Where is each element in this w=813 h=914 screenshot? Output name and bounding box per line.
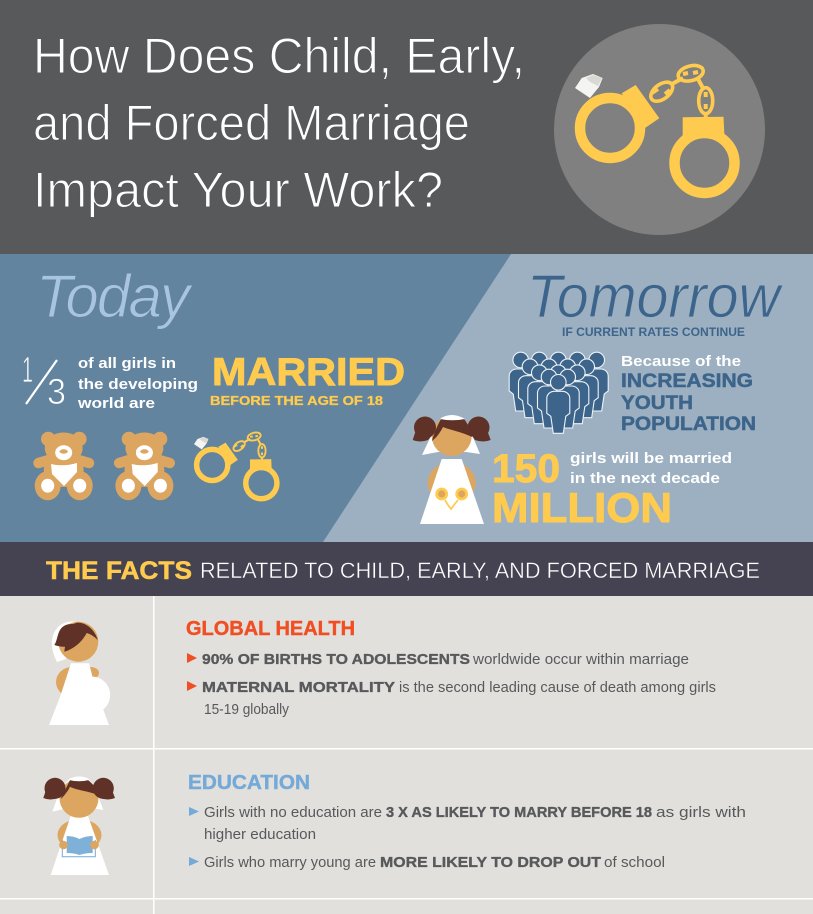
icon: pregnant bride <box>49 622 110 725</box>
bullet: drop out: MORE LIKELY TO DROP OUT <box>380 854 601 871</box>
text: youth population: POPULATION <box>621 414 756 435</box>
panel: today <box>0 254 813 542</box>
heading: today: Today <box>36 263 194 330</box>
icon: handcuffs with diamond ring in circle <box>554 24 765 235</box>
icon: bride with book <box>43 776 115 875</box>
bullet: maternal mortality: 15-19 globally <box>204 701 289 718</box>
text: youth population: Because of the <box>621 353 741 370</box>
bullet: drop out: Girls who marry young are <box>204 854 376 871</box>
text: youth population: INCREASING <box>621 371 753 392</box>
section: education: EDUCATION <box>188 772 310 794</box>
panel: tomorrow <box>323 254 813 542</box>
bullet: likely to marry: 3 X AS LIKELY TO MARRY BEFORE 18 <box>386 804 652 821</box>
stat: one third <box>22 349 66 412</box>
bullet: likely to marry: higher education <box>204 826 316 843</box>
callout: married: BEFORE THE AGE OF 18 <box>210 393 383 408</box>
bullet: drop out <box>189 854 665 871</box>
stat: 150 million <box>492 447 732 531</box>
title <box>33 28 525 218</box>
section: global health <box>186 618 716 718</box>
bullet: maternal mortality: is the second leading cause of death among girls <box>399 679 716 696</box>
text: youth population: YOUTH <box>621 393 693 414</box>
text: of all girls: the developing <box>78 376 198 393</box>
icon: crowd <box>509 352 608 433</box>
heading: tomorrow: Tomorrow <box>527 263 784 330</box>
title: and Forced Marriage <box>33 95 470 151</box>
panel: facts <box>0 596 813 914</box>
bullet: births: worldwide occur within marriage <box>472 651 689 668</box>
text: youth population <box>621 353 756 435</box>
stat: one third: 1 <box>22 349 33 390</box>
stat: one third: 3 <box>47 371 66 412</box>
bullet: likely to marry <box>189 804 746 843</box>
section: global health: GLOBAL HEALTH <box>186 618 355 640</box>
icon: teddy bear <box>115 432 173 500</box>
section: education <box>188 772 746 871</box>
stat: 150 million: girls will be married <box>570 450 732 467</box>
bullet: births: 90% OF BIRTHS TO ADOLESCENTS <box>202 651 470 668</box>
title: How Does Child, Early, <box>33 28 525 84</box>
stat: 150 million: MILLION <box>492 484 672 531</box>
subheading: IF CURRENT RATES CONTINUE <box>562 325 745 339</box>
text: of all girls: of all girls in <box>78 355 176 372</box>
bullet: drop out: of school <box>604 854 665 871</box>
icon: teddy bear <box>35 432 93 500</box>
bullet: maternal mortality: MATERNAL MORTALITY <box>202 679 395 696</box>
band: the facts heading <box>0 542 813 596</box>
icon: handcuffs <box>194 431 277 499</box>
band: the facts heading: THE FACTS <box>46 557 192 585</box>
icon: bride in handcuffs <box>413 415 491 524</box>
callout: married: MARRIED <box>212 351 405 394</box>
text: of all girls: world are <box>77 395 155 412</box>
band: the facts heading: RELATED TO CHILD, EARLY, AND FORCED MARRIAGE <box>200 558 760 583</box>
bullet: likely to marry: as girls with <box>656 804 746 821</box>
title: Impact Your Work? <box>33 162 443 218</box>
bullet: maternal mortality <box>187 679 716 718</box>
bullet: likely to marry: Girls with no education are <box>204 804 382 821</box>
stat: 150 million: 150 <box>492 447 560 491</box>
text: of all girls <box>77 355 198 412</box>
header panel <box>0 0 813 254</box>
bullet: births <box>187 651 689 668</box>
stat: 150 million: in the next decade <box>570 470 720 487</box>
